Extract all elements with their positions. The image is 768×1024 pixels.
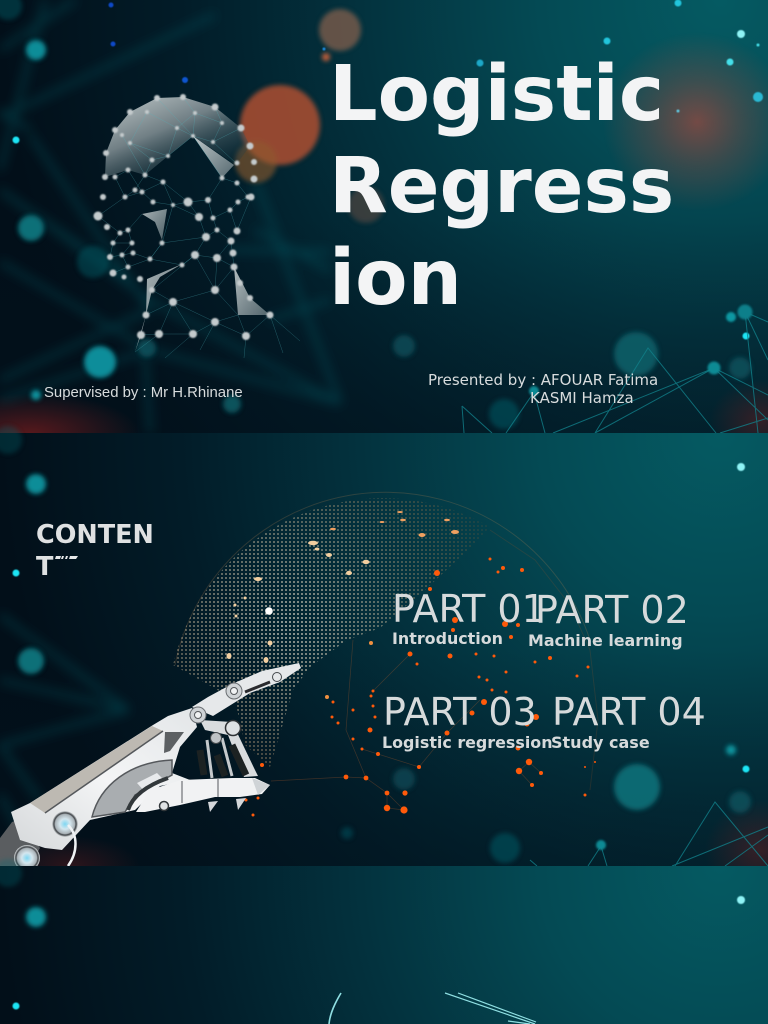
title: Regress [329, 141, 674, 230]
text: part 02 [528, 588, 689, 650]
icon: robot arm [0, 663, 301, 871]
heading: content: T [36, 552, 54, 582]
text: part 02: PART 02 [535, 588, 689, 632]
title: Logistic [329, 49, 664, 138]
text: part 03: PART 03 [383, 690, 537, 734]
text: part 01: PART 01 [392, 587, 546, 631]
panel: background slide 2 [0, 426, 768, 900]
chart: dotted globe [173, 492, 598, 816]
heading: content: CONTEN [36, 520, 154, 550]
text: presenters: KASMI Hamza [530, 389, 634, 407]
heading: content [36, 520, 154, 582]
panel: background slide 1 [0, 0, 768, 473]
text: part 03 [382, 690, 553, 752]
text: presenters: Presented by : AFOUAR Fatima [428, 371, 658, 389]
icon: partial circle arc and lines [329, 993, 536, 1024]
text: supervisor: Supervised by : Mr H.Rhinane [44, 385, 243, 401]
text: part 04: PART 04 [552, 690, 706, 734]
text: part 03: Logistic regression [382, 733, 553, 752]
text: part 01: Introduction [392, 629, 503, 648]
icon: wireframe polygon head [94, 94, 300, 358]
title: ion [329, 233, 462, 322]
text: part 02: Machine learning [528, 631, 683, 650]
panel: background slide 3 [0, 859, 768, 1024]
text: part 04: Study case [551, 733, 650, 752]
